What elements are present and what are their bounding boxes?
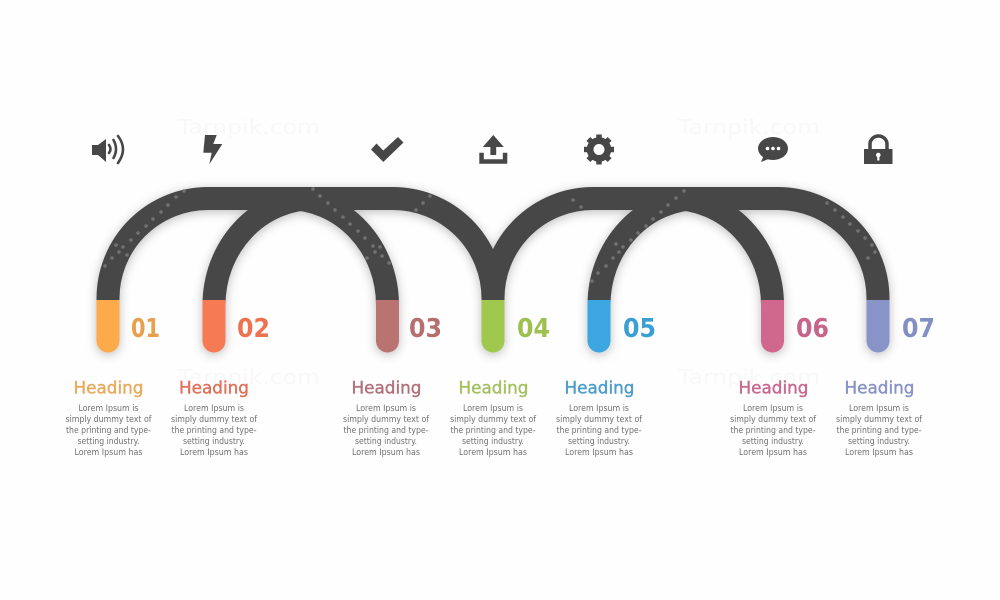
text block 05: setting industry. <box>568 437 630 447</box>
text block 04 <box>450 378 537 458</box>
text block 04: the printing and type- <box>450 426 536 436</box>
text block 02: Heading <box>179 378 249 398</box>
icon: padlock <box>864 136 892 164</box>
text block 06: Lorem Ipsum has <box>739 448 808 458</box>
text block 06: the printing and type- <box>730 426 816 436</box>
watermarks: Tarnpik.com <box>177 365 320 389</box>
text block 05: Lorem Ipsum has <box>565 448 634 458</box>
text block 01: Lorem Ipsum has <box>74 448 143 458</box>
text block 03 <box>343 378 430 458</box>
text block 01: setting industry. <box>78 437 140 447</box>
watermark dots <box>105 189 875 281</box>
text block 02 <box>171 378 258 458</box>
text block 04: Lorem Ipsum is <box>463 404 524 414</box>
text block 06 <box>730 378 817 458</box>
text block 02: Lorem Ipsum has <box>180 448 249 458</box>
stem 03 <box>376 300 399 352</box>
number 07: 07 <box>902 314 935 344</box>
text block 04: Lorem Ipsum has <box>459 448 528 458</box>
text block 03: Heading <box>352 378 422 398</box>
text block 01: Lorem Ipsum is <box>78 404 139 414</box>
timeline track with coloured stems <box>96 198 890 352</box>
text block 04: setting industry. <box>462 437 524 447</box>
text block 06: simply dummy text of <box>730 415 817 425</box>
text block 02: simply dummy text of <box>171 415 258 425</box>
watermarks <box>177 115 820 389</box>
watermarks: Tarnpik.com <box>677 365 820 389</box>
stem 01 <box>96 300 120 352</box>
text block 01: Heading <box>74 378 144 398</box>
text block 05 <box>556 378 643 458</box>
icon: lightning bolt <box>203 135 222 164</box>
number 04: 04 <box>517 314 550 344</box>
text block 06: setting industry. <box>742 437 804 447</box>
stem 05 <box>588 300 610 352</box>
text block 04: Heading <box>458 378 528 398</box>
text block 06: Heading <box>738 378 808 398</box>
text block 07: Heading <box>844 378 914 398</box>
icon: speech bubble <box>758 137 788 162</box>
text block 05: Lorem Ipsum is <box>569 404 630 414</box>
text block 05: simply dummy text of <box>556 415 643 425</box>
text block 03: Lorem Ipsum has <box>352 448 421 458</box>
icon: speaker <box>92 136 123 163</box>
stem 04 <box>482 300 504 352</box>
text block 07 <box>836 378 923 458</box>
text block 04: simply dummy text of <box>450 415 537 425</box>
dark arches <box>108 198 878 305</box>
icon: gear <box>584 134 614 164</box>
text block 07: Lorem Ipsum has <box>845 448 914 458</box>
number 02: 02 <box>237 314 270 344</box>
number 06: 06 <box>796 314 829 344</box>
text block 01: the printing and type- <box>66 426 151 436</box>
text block 03: the printing and type- <box>344 426 428 436</box>
stem 02 <box>202 300 226 352</box>
text block 02: Lorem Ipsum is <box>184 404 245 414</box>
text block 03: setting industry. <box>355 437 417 447</box>
number 01: 01 <box>131 314 160 344</box>
icon: check mark <box>371 137 404 162</box>
text block 05: Heading <box>564 378 634 398</box>
text block 03: simply dummy text of <box>343 415 430 425</box>
text block 05: the printing and type- <box>556 426 642 436</box>
text block 01 <box>66 378 152 458</box>
watermarks: Tarnpik.com <box>677 115 820 139</box>
text block 06: Lorem Ipsum is <box>743 404 804 414</box>
stem 06 <box>761 300 784 352</box>
text block 02: setting industry. <box>183 437 245 447</box>
text block 07: the printing and type- <box>836 426 922 436</box>
text block 07: setting industry. <box>848 437 910 447</box>
stem 07 <box>866 300 890 352</box>
text block 03: Lorem Ipsum is <box>356 404 417 414</box>
text block 01: simply dummy text of <box>66 415 152 425</box>
number 05: 05 <box>623 314 656 344</box>
text block 02: the printing and type- <box>172 426 256 436</box>
text block 07: Lorem Ipsum is <box>849 404 910 414</box>
watermarks: Tarnpik.com <box>177 115 320 139</box>
number 03: 03 <box>409 314 442 344</box>
text block 07: simply dummy text of <box>836 415 923 425</box>
icon: upload <box>479 135 507 164</box>
